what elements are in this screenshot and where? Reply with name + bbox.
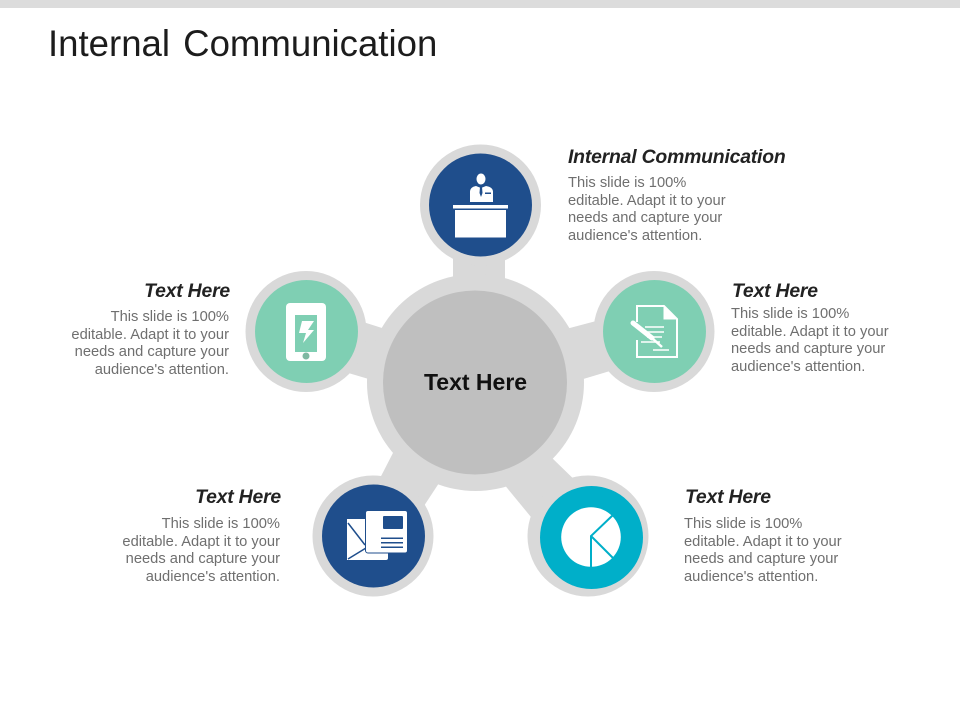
- node: right, document icon: [594, 271, 714, 392]
- text block: left: audience's attention.: [95, 362, 229, 378]
- text block: left: This slide is 100%: [111, 309, 229, 325]
- icon: pie chart: [561, 507, 621, 567]
- text block: bottom right: audience's attention.: [684, 569, 818, 585]
- title: Internal Communication: [48, 23, 437, 64]
- text block: left: [71, 280, 230, 378]
- text block: left: needs and capture your: [75, 344, 229, 360]
- icon: envelope and newsletter: [347, 510, 408, 560]
- text block: internal communication: needs and capture your: [568, 210, 722, 226]
- text block: internal communication: [568, 146, 786, 244]
- node: bottom left, newsletter icon: [312, 476, 434, 596]
- text block: bottom right: Text Here: [685, 486, 771, 508]
- node: top, presenter icon: [420, 144, 541, 266]
- text block: bottom left: editable. Adapt it to your: [122, 534, 280, 550]
- central hub: Text Here: [424, 369, 527, 395]
- text block: right: needs and capture your: [731, 341, 885, 357]
- text block: internal communication: Internal Communication: [568, 146, 786, 168]
- text block: right: [731, 280, 889, 375]
- text block: internal communication: This slide is 100%: [568, 175, 686, 191]
- text block: bottom left: Text Here: [195, 486, 281, 508]
- central hub: [367, 274, 584, 491]
- text block: right: editable. Adapt it to your: [731, 324, 889, 340]
- text block: left: editable. Adapt it to your: [71, 327, 229, 343]
- text block: bottom right: editable. Adapt it to your: [684, 534, 842, 550]
- text block: bottom right: [684, 486, 842, 585]
- text block: internal communication: audience's attention.: [568, 228, 702, 244]
- text block: right: audience's attention.: [731, 359, 865, 375]
- text block: bottom left: audience's attention.: [146, 569, 280, 585]
- text block: right: Text Here: [732, 280, 818, 302]
- node: bottom right, pie chart icon: [528, 476, 648, 596]
- text block: bottom right: This slide is 100%: [684, 516, 802, 532]
- node: left, phone icon: [246, 271, 366, 392]
- icon: phone with lightning bolt: [286, 303, 326, 361]
- text block: bottom left: needs and capture your: [126, 551, 280, 567]
- text block: bottom left: This slide is 100%: [162, 516, 280, 532]
- top bar: [0, 0, 960, 8]
- spokes: [345, 240, 610, 528]
- text block: left: Text Here: [144, 280, 230, 302]
- icon: document and pen: [633, 306, 677, 357]
- icon: presenter at desk: [453, 174, 508, 238]
- text block: bottom left: [122, 486, 281, 585]
- text block: internal communication: editable. Adapt it to your: [568, 193, 726, 209]
- text block: right: This slide is 100%: [731, 306, 849, 322]
- text block: bottom right: needs and capture your: [684, 551, 838, 567]
